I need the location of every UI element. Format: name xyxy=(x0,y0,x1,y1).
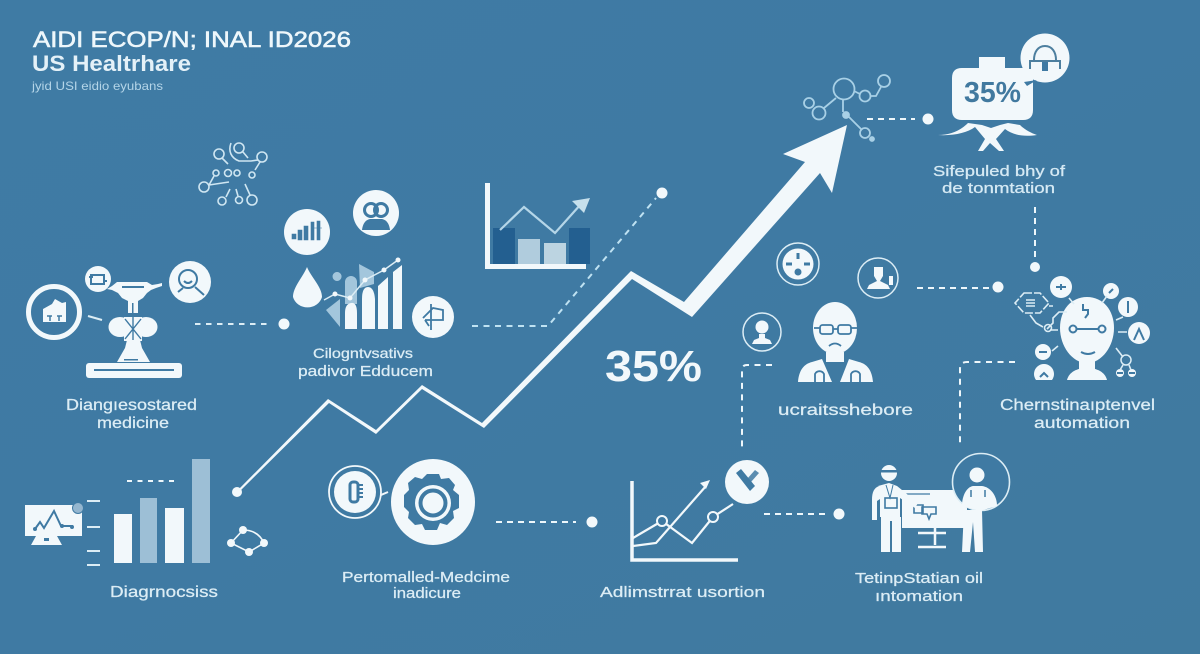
panel: personalized medicine gear xyxy=(329,459,475,545)
title xyxy=(31,27,351,93)
icon: smiley magnifier badge xyxy=(169,261,211,303)
icon: bars badge xyxy=(284,209,330,255)
connector: network to stat board xyxy=(867,114,934,124)
icon: clinician ring badge xyxy=(858,258,898,298)
connector: gear to admin chart xyxy=(496,516,598,528)
icon: ruler badge xyxy=(329,466,388,518)
icon: pills ring badge xyxy=(777,243,819,285)
label: top right: Sifepuled bhy of xyxy=(933,163,1066,180)
connector: dashed rising line xyxy=(472,188,668,326)
icon: water drop xyxy=(293,267,322,307)
icon: small device badge xyxy=(85,266,111,292)
growth arrow start dot xyxy=(232,487,242,497)
bar chart: rising analytics xyxy=(324,258,402,329)
panel: training workers and board xyxy=(872,454,1010,552)
label: training automation: TetinpStatian oil xyxy=(855,570,983,587)
icon: top-left molecule network xyxy=(199,143,267,205)
label: personalized medicine: Pertomalled-Medcime xyxy=(342,570,510,586)
connector: admin chart to workers xyxy=(764,508,844,520)
icon: satellite badges xyxy=(1034,276,1150,380)
title: jyid USI eidio eyubans xyxy=(31,79,163,93)
icon: doctor in ring xyxy=(952,454,1010,552)
icon: tools badge xyxy=(725,460,769,504)
icon: presenter xyxy=(872,465,918,552)
label: top right xyxy=(933,163,1066,197)
panel: administration line chart xyxy=(632,460,769,560)
icon: microscope stand xyxy=(86,282,182,378)
label: chemist automation: automation xyxy=(1034,415,1130,432)
label: top right: de tonmtation xyxy=(942,180,1055,197)
icon: worker ring badge xyxy=(743,313,781,351)
label: administrative automation: Adlimstrrat usortion xyxy=(600,584,765,601)
label: personalized medicine xyxy=(342,570,510,602)
label: chemist automation xyxy=(1000,397,1155,432)
icon: presentation board xyxy=(902,490,967,547)
panel: AI head cluster xyxy=(1015,276,1150,380)
axis ticks xyxy=(87,501,100,565)
icon: monitor xyxy=(25,502,84,545)
callout: 35% board: 35% xyxy=(964,77,1021,109)
label: personalized medicine: inadicure xyxy=(393,586,461,602)
connector: chart to doctor xyxy=(742,365,772,447)
label: cognitive predictive: padivor Edducem xyxy=(298,364,433,380)
title: US Healtrhare xyxy=(32,51,191,76)
label: diagnostics medicine: Diangıesostared xyxy=(66,397,197,414)
panel: analytics cluster xyxy=(284,190,454,338)
title: AIDI ECOP/N; INAL ID2026 xyxy=(33,27,351,52)
label: healthcare workers: ucraitsshebore xyxy=(778,402,913,419)
label: training automation xyxy=(855,570,983,605)
connector: apparatus to analytics xyxy=(195,318,290,330)
icon: doctor xyxy=(798,302,873,382)
label: diagnostics medicine: medicine xyxy=(97,415,169,432)
icon: molecule badge xyxy=(412,296,454,338)
label: cognitive predictive xyxy=(298,345,433,380)
panel: diagnosis bar chart xyxy=(25,459,268,565)
label: diagnosis: Diagrnocsiss xyxy=(110,584,218,601)
label: training automation: ıntomation xyxy=(875,588,963,605)
icon: house in ring xyxy=(28,286,80,338)
main growth arrow xyxy=(237,125,847,493)
label: cognitive predictive: Cilogntvsativs xyxy=(313,345,413,361)
connector: workers to AI head xyxy=(960,362,1015,444)
callout: 35% board xyxy=(938,57,1037,151)
panel: doctor cluster xyxy=(743,243,898,382)
icon: gear xyxy=(391,459,475,545)
label: diagnostics medicine xyxy=(66,397,197,432)
chart: small bars and trend xyxy=(488,183,590,266)
icon: network top xyxy=(804,75,890,141)
panel: diagnostics apparatus xyxy=(28,261,211,378)
big stat 35%: 35% xyxy=(605,342,702,391)
panel: top network and target xyxy=(804,34,1070,151)
icon: AI robot head xyxy=(1060,297,1114,380)
icon: lock badge xyxy=(1020,34,1070,86)
connector: vertical dashed to AI head xyxy=(1030,207,1040,272)
connector: doctor to AI head xyxy=(917,282,1004,292)
label: chemist automation: Chernstinaıptenvel xyxy=(1000,397,1155,414)
icon: small node network xyxy=(227,526,268,556)
icon: person badge xyxy=(353,190,399,236)
bars xyxy=(114,459,210,563)
icon: circuit hexagon xyxy=(1015,293,1067,332)
